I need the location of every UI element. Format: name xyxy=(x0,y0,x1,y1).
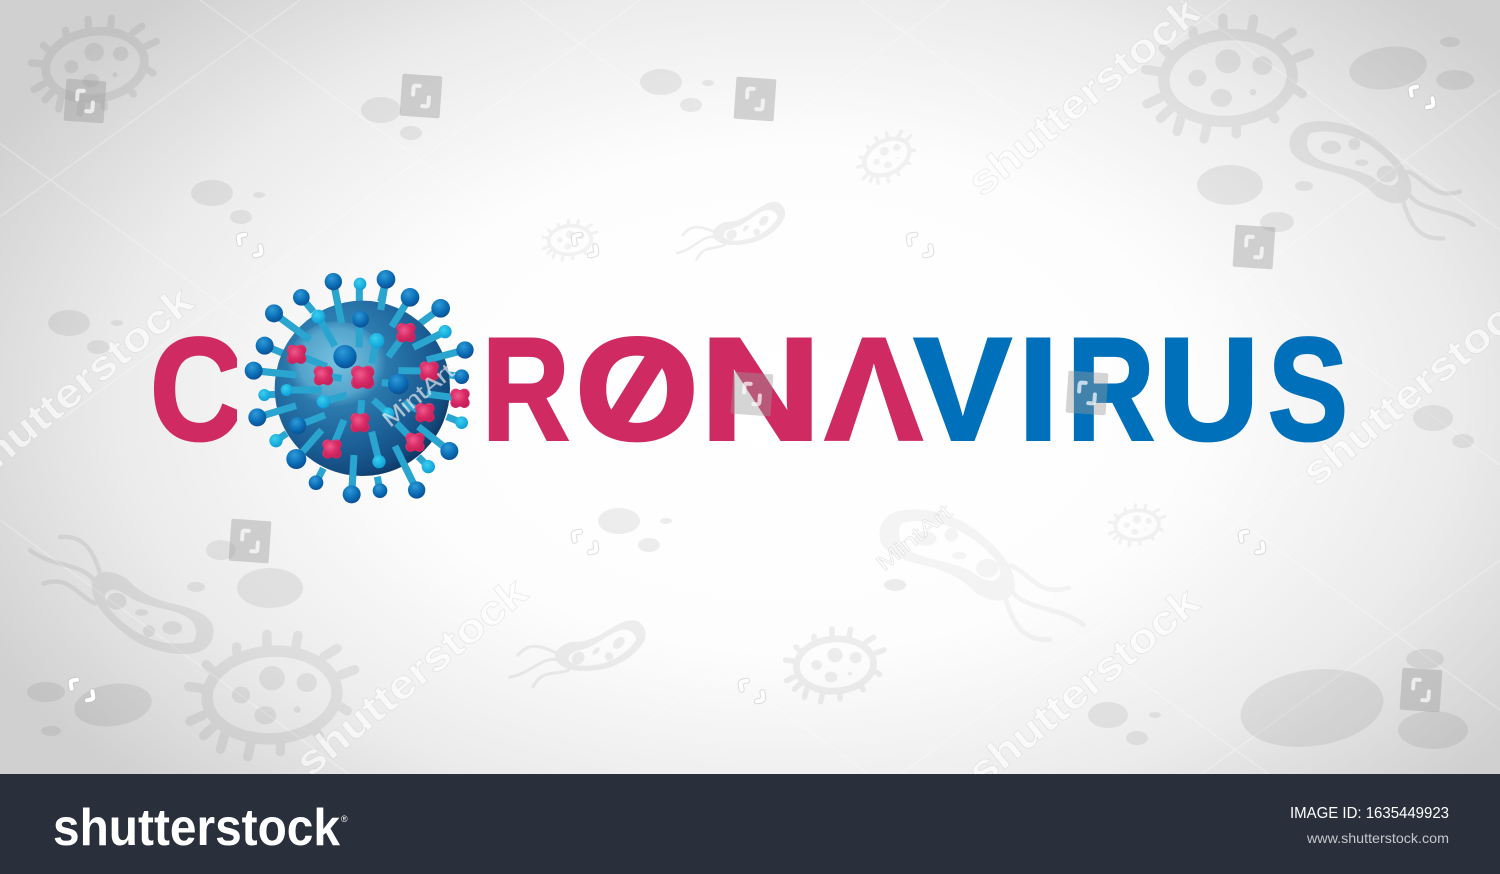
letter V: V xyxy=(914,308,1011,470)
virus highlight xyxy=(287,322,387,412)
virus body xyxy=(275,301,450,476)
bacterium: small bottom xyxy=(503,577,652,728)
letter U: U xyxy=(1158,308,1259,471)
germ: top right xyxy=(1146,18,1310,139)
germ: small top centre xyxy=(850,124,924,191)
virus outer spikes xyxy=(254,279,465,494)
letter S: S xyxy=(1268,308,1348,471)
germ: bottom centre xyxy=(786,629,884,702)
germ: bottom left xyxy=(189,634,355,757)
virus inner spikes xyxy=(254,279,465,494)
letter R: R xyxy=(1067,309,1155,471)
bacterium: bottom left xyxy=(30,537,214,654)
letter I: I xyxy=(1018,308,1059,470)
letter R: R xyxy=(482,309,570,471)
title: CORONAVIRUS xyxy=(154,323,1344,452)
watermark text: shutterstock xyxy=(958,0,1208,205)
website: www.shutterstock.com xyxy=(1306,830,1449,846)
germ: top left xyxy=(28,14,161,116)
watermark text: MintArt xyxy=(871,499,957,576)
footer logo: shutterstock xyxy=(53,799,340,857)
footer bar xyxy=(0,774,1500,874)
letter N: N xyxy=(700,309,821,471)
germ: small left xyxy=(543,220,597,260)
bacterium: centre xyxy=(879,509,1083,640)
virus pink proteins xyxy=(287,323,470,459)
registered mark: ® xyxy=(341,814,348,824)
virus illustration xyxy=(245,270,474,503)
floating blobs xyxy=(27,37,1474,756)
virus dark balls xyxy=(245,270,474,503)
bacterium: small top xyxy=(671,169,791,292)
bacterium: top right xyxy=(1290,121,1473,238)
watermark text: MintArt xyxy=(377,359,459,432)
virus light balls xyxy=(258,278,468,473)
germ: small right xyxy=(1109,505,1165,546)
watermark text: shutterstock xyxy=(958,578,1208,795)
letter A (no crossbar): Λ xyxy=(825,308,922,470)
watermark badges xyxy=(64,74,1442,712)
image id: IMAGE ID: 1635449923 xyxy=(1290,805,1449,822)
letter O with prohibition slash: O xyxy=(575,309,699,471)
watermark text: shutterstock xyxy=(286,568,536,785)
letter C: C xyxy=(150,309,243,471)
